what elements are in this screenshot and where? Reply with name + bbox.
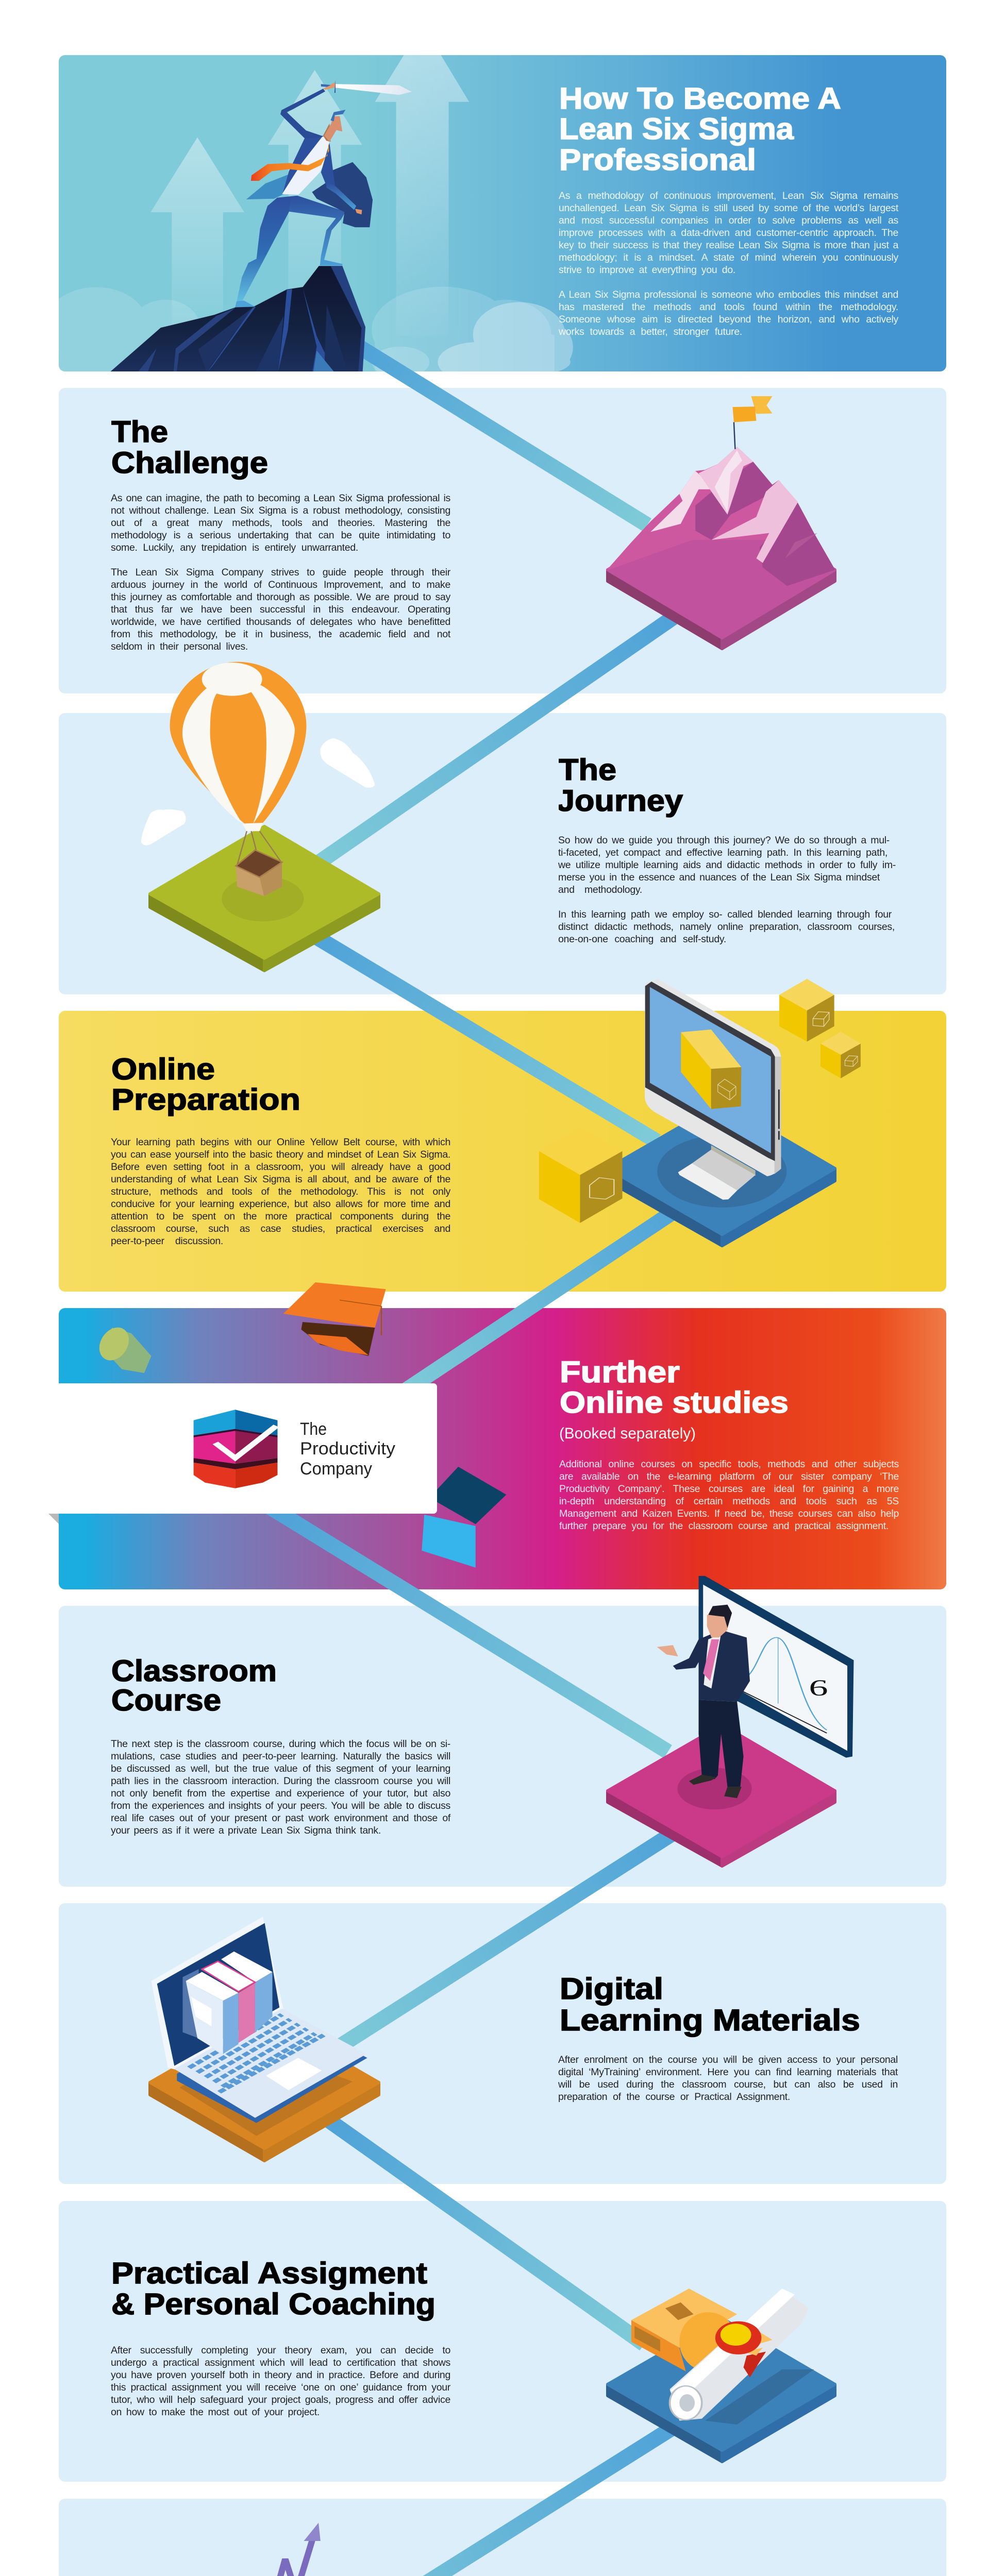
mountain on pink platform	[607, 396, 835, 649]
journey body text: In this learning path we employ so- called blended learning through four	[558, 909, 892, 920]
online preparation body text: Before even setting foot in a classroom, you will already have a good	[111, 1161, 450, 1173]
logo card	[48, 1383, 437, 1524]
keyboard	[189, 2014, 324, 2092]
logo wordmark: Company	[300, 1459, 372, 1479]
trend arrow	[223, 2538, 313, 2576]
laptop	[422, 1467, 506, 1568]
classroom course heading: Course	[111, 1684, 221, 1717]
challenge body text: some. Luckily, any trepidation is entirely unwarranted.	[111, 542, 358, 553]
practical assignment body text: this practical assignment you will receive ‘one on one’ guidance from your	[111, 2382, 450, 2393]
balloon neck	[242, 823, 263, 831]
landing shadow	[222, 876, 304, 922]
clouds	[320, 738, 375, 788]
hero heading: Professional	[559, 143, 756, 177]
hero body text: unchallenged. Lean Six Sigma is still used by some of the world’s largest	[559, 202, 898, 214]
logo mark	[194, 1410, 277, 1488]
classroom course body text: your peers as if it were a private Lean Six Sigma think tank.	[111, 1825, 381, 1836]
hero body text	[559, 190, 899, 337]
flag	[734, 422, 735, 449]
digital learning materials body text: will be used during the classroom course, but can also be used in	[558, 2079, 898, 2090]
journey heading: The	[559, 753, 616, 787]
challenge body text: methodology is a serious undertaking that can be quite intimidating to	[111, 530, 450, 541]
mountain body	[607, 447, 835, 586]
laptop base	[177, 2012, 367, 2123]
further online studies body text: Additional online courses on specific tools, methods and other subjects	[559, 1459, 899, 1470]
classroom course heading	[111, 1654, 277, 1717]
monitor and blocks on blue platform	[539, 979, 861, 1246]
online preparation body text: Your learning path begins with our Online Yellow Belt course, with which	[111, 1137, 450, 1148]
digital learning materials body text: digital ‘MyTraining’ environment. Here you can find learning materials that	[558, 2066, 898, 2078]
practical assignment body text: After successfully completing your theory exam, you can decide to	[111, 2345, 450, 2356]
seal	[744, 2352, 766, 2377]
challenge body text: this journey as comfortable and thorough as possible. We are proud to say	[111, 591, 450, 603]
journey body text: merse you in the essence and nuances of the Lean Six Sigma mindset	[558, 872, 880, 883]
challenge body text: As one can imagine, the path to becoming a Lean Six Sigma professional is	[111, 493, 450, 504]
rising bar chart on olive platform	[150, 2523, 379, 2576]
panel: online preparation	[59, 1011, 946, 1292]
hero body text: has mastered the methods and tools found within the methodology.	[559, 301, 898, 313]
monitor screen	[650, 987, 771, 1154]
hero illustration: businessman with sword on rock	[111, 79, 412, 371]
online preparation body text: peer-to-peer discussion.	[111, 1235, 223, 1247]
monitor stand	[711, 1145, 756, 1176]
digital learning materials heading: Learning Materials	[560, 2004, 860, 2037]
classroom course body text: The next step is the classroom course, during which the focus will be on si-	[111, 1738, 450, 1750]
hero body text: and most successful companies in order to solve problems as well as	[559, 215, 898, 226]
basket	[236, 866, 264, 896]
digital learning materials heading	[560, 1972, 860, 2037]
classroom course body text: be discussed as well, but the true value of this segment of your learning	[111, 1763, 450, 1774]
classroom course body text: not only benefit from the expertise and experience of your tutor, but also	[111, 1788, 450, 1799]
monitor frame	[645, 979, 781, 1176]
trackpad	[266, 2058, 322, 2090]
panel: the journey	[59, 713, 946, 994]
journey body text: we utilize multiple learning aids and didactic methods in order to fully im-	[558, 859, 896, 871]
further online studies heading: Online studies	[560, 1386, 789, 1419]
online preparation body text: attention to be spent on the more practical components during the	[111, 1211, 450, 1222]
challenge heading: Challenge	[111, 446, 268, 480]
platform	[150, 826, 379, 971]
practical assignment body text: undergo a practical assignment which will lead to certification that shows	[111, 2357, 450, 2368]
online preparation body text: understanding of what Lean Six Sigma is all about, and be aware of the	[111, 1174, 450, 1185]
digital learning materials heading: Digital	[560, 1972, 663, 2006]
challenge body text: out of a great many methods, tools and theories. Mastering the	[111, 517, 450, 529]
digital learning materials body text	[558, 2054, 898, 2103]
journey body text	[558, 835, 896, 945]
practical assignment body text: on how to make the most out of your project.	[111, 2406, 320, 2418]
practical assignment heading: Practical Assigment	[111, 2257, 427, 2290]
further online studies heading	[560, 1355, 789, 1419]
panel: practical assignment and personal coaching	[59, 2201, 946, 2482]
journey heading: Journey	[559, 784, 683, 818]
ropes	[237, 831, 281, 865]
further online studies body text: are available on the e-learning platform of our sister company ‘The	[559, 1471, 899, 1482]
hero heading: Lean Six Sigma	[559, 112, 794, 146]
practical assignment heading: & Personal Coaching	[111, 2287, 435, 2321]
upper block	[779, 979, 834, 1010]
large block	[539, 1127, 623, 1223]
journey heading	[559, 753, 683, 818]
challenge heading: The	[111, 415, 168, 449]
panel: achieve results	[59, 2499, 946, 2576]
shadow	[705, 2369, 814, 2425]
whiteboard: 6	[809, 1675, 828, 1701]
classroom course heading: Classroom	[111, 1654, 277, 1688]
online preparation body text	[111, 1137, 450, 1247]
classroom course body text: mulations, case studies and peer-to-peer learning. Naturally the basics will	[111, 1751, 450, 1762]
further online studies body text	[559, 1459, 899, 1532]
floating online study items and logo card	[48, 1282, 506, 1568]
rock	[111, 266, 365, 371]
journey body text: one-on-one coaching and self-study.	[558, 934, 726, 945]
challenge body text: The Lean Six Sigma Company strives to guide people through their	[111, 567, 450, 578]
hero body text: A Lean Six Sigma professional is someone who embodies this mindset and	[559, 289, 898, 300]
classroom course body text: real life cases out of your present or past work environment and those of	[111, 1812, 450, 1824]
block on screen	[681, 1029, 741, 1069]
businessman	[235, 79, 412, 308]
panel: digital learning materials	[59, 1903, 946, 2184]
presenter	[657, 1605, 750, 1798]
orange stamp	[631, 2320, 686, 2371]
online preparation body text: classroom course, such as case studies, practical exercises and	[111, 1223, 450, 1234]
journey body text: ti-faceted, yet compact and effective learning path. In this learning path,	[558, 847, 887, 858]
challenge body text: seldom in their personal lives.	[111, 641, 248, 652]
platform	[608, 502, 835, 649]
scroll	[670, 2289, 809, 2420]
platform	[608, 1725, 835, 1866]
hero body text: Someone whose aim is directed beyond the horizon, and who actively	[559, 314, 898, 325]
journey body text: and methodology.	[558, 884, 642, 895]
hero body text: works towards a better, stronger future.	[559, 326, 742, 337]
panel: the challenge	[59, 388, 946, 693]
hero body text: key to their success is that they realise Lean Six Sigma is more than just a	[559, 240, 898, 251]
panel: classroom course	[59, 1606, 946, 1887]
presenter shadow	[677, 1768, 752, 1809]
hot air balloon on olive platform	[141, 662, 379, 971]
panel: further online studies	[59, 1308, 946, 1589]
journey body text: distinct didactic methods, namely online preparation, classroom courses,	[558, 921, 895, 933]
further online studies heading: Further	[560, 1355, 680, 1389]
logo wordmark: Productivity	[300, 1439, 395, 1459]
platform	[608, 1103, 835, 1246]
challenge body text: worldwide, we have certified thousands of delegates who have benefitted	[111, 616, 450, 628]
challenge body text: from this methodology, be it in business, the academic field and not	[111, 629, 450, 640]
graduation cap	[283, 1282, 386, 1356]
online preparation heading	[111, 1053, 300, 1116]
platform shadow	[179, 2046, 353, 2136]
laptop screen	[151, 1917, 283, 2070]
online preparation body text: conducive for your learning experience, but also allows for more time and	[111, 1198, 450, 1210]
online preparation heading: Online	[111, 1053, 215, 1086]
snow caps	[650, 471, 711, 532]
challenge body text	[111, 493, 450, 652]
whiteboard	[699, 1576, 853, 1758]
challenge body text: that thus far we have been successful in this endeavour. Operating	[111, 604, 450, 615]
further online studies body text: Productivity Company’. These courses are ideal for gaining a more	[559, 1483, 899, 1495]
books	[182, 1969, 199, 2038]
further online studies body text: in-depth understanding of certain methods and tools such as 5S	[559, 1496, 899, 1507]
hero background arrows and clouds	[59, 55, 573, 371]
platform shadow	[657, 1135, 786, 1208]
panel: hero	[59, 55, 946, 371]
practical assignment heading	[111, 2257, 435, 2321]
digital learning materials body text: After enrolment on the course you will be given access to your personal	[558, 2054, 898, 2065]
journey body text: So how do we guide you through this journey? We do so through a mul-	[558, 835, 890, 846]
classroom course body text	[111, 1738, 450, 1836]
platform	[608, 2318, 835, 2462]
classroom course body text: from the experiences and insights of your peers. You will be able to discuss	[111, 1800, 450, 1811]
logo wordmark: The	[300, 1419, 327, 1439]
laptop with books on orange platform	[150, 1917, 379, 2161]
practical assignment body text: you have proven yourself both in theory and in practice. Before and during	[111, 2369, 450, 2381]
hero body text: improve processes with a data-driven and customer-centric approach. The	[559, 227, 898, 239]
platform	[150, 2016, 379, 2161]
diploma and stamp on blue platform	[608, 2289, 835, 2462]
learning path ribbon	[268, 345, 691, 2576]
practical assignment body text: tutor, who will help safeguard your project goals, progress and offer advice	[111, 2394, 450, 2405]
hero body text: methodology; it is a mindset. A state of mind wherein you continuously	[559, 252, 898, 263]
challenge body text: not without challenge. Lean Six Sigma is a robust methodology, consisting	[111, 505, 450, 516]
challenge body text: arduous journey in the world of Continuous Improvement, and to make	[111, 579, 450, 590]
hero heading: How To Become A	[559, 82, 841, 115]
online preparation body text: structure, methods and tools of the methodology. This is not only	[111, 1186, 450, 1197]
hero body text: strive to improve at everything you do.	[559, 264, 735, 276]
classroom course body text: path lies in the classroom interaction. During the classroom course you will	[111, 1775, 450, 1787]
challenge heading	[111, 415, 268, 480]
online preparation heading: Preparation	[111, 1083, 300, 1116]
hero body text: As a methodology of continuous improvement, Lean Six Sigma remains	[559, 190, 898, 201]
small block	[820, 1031, 861, 1055]
logo wordmark	[300, 1419, 395, 1479]
green cup	[95, 1326, 151, 1373]
presenter and whiteboard on pink platform	[608, 1576, 853, 1866]
practical assignment body text	[111, 2345, 450, 2418]
balloon envelope	[170, 662, 306, 824]
digital learning materials body text: preparation of the course or Practical Assignment.	[558, 2091, 790, 2103]
hero heading	[559, 82, 841, 177]
online preparation body text: you can ease yourself into the basic theory and mindset of Lean Six Sigma.	[111, 1149, 450, 1160]
further online studies body text: Management and Kaizen Events. If need be, these courses can also help	[559, 1508, 899, 1519]
further online studies body text: further prepare you for the classroom course and practical assignment.	[559, 1520, 889, 1532]
monitor bezel	[645, 981, 775, 1161]
booked separately note: (Booked separately)	[559, 1425, 696, 1442]
